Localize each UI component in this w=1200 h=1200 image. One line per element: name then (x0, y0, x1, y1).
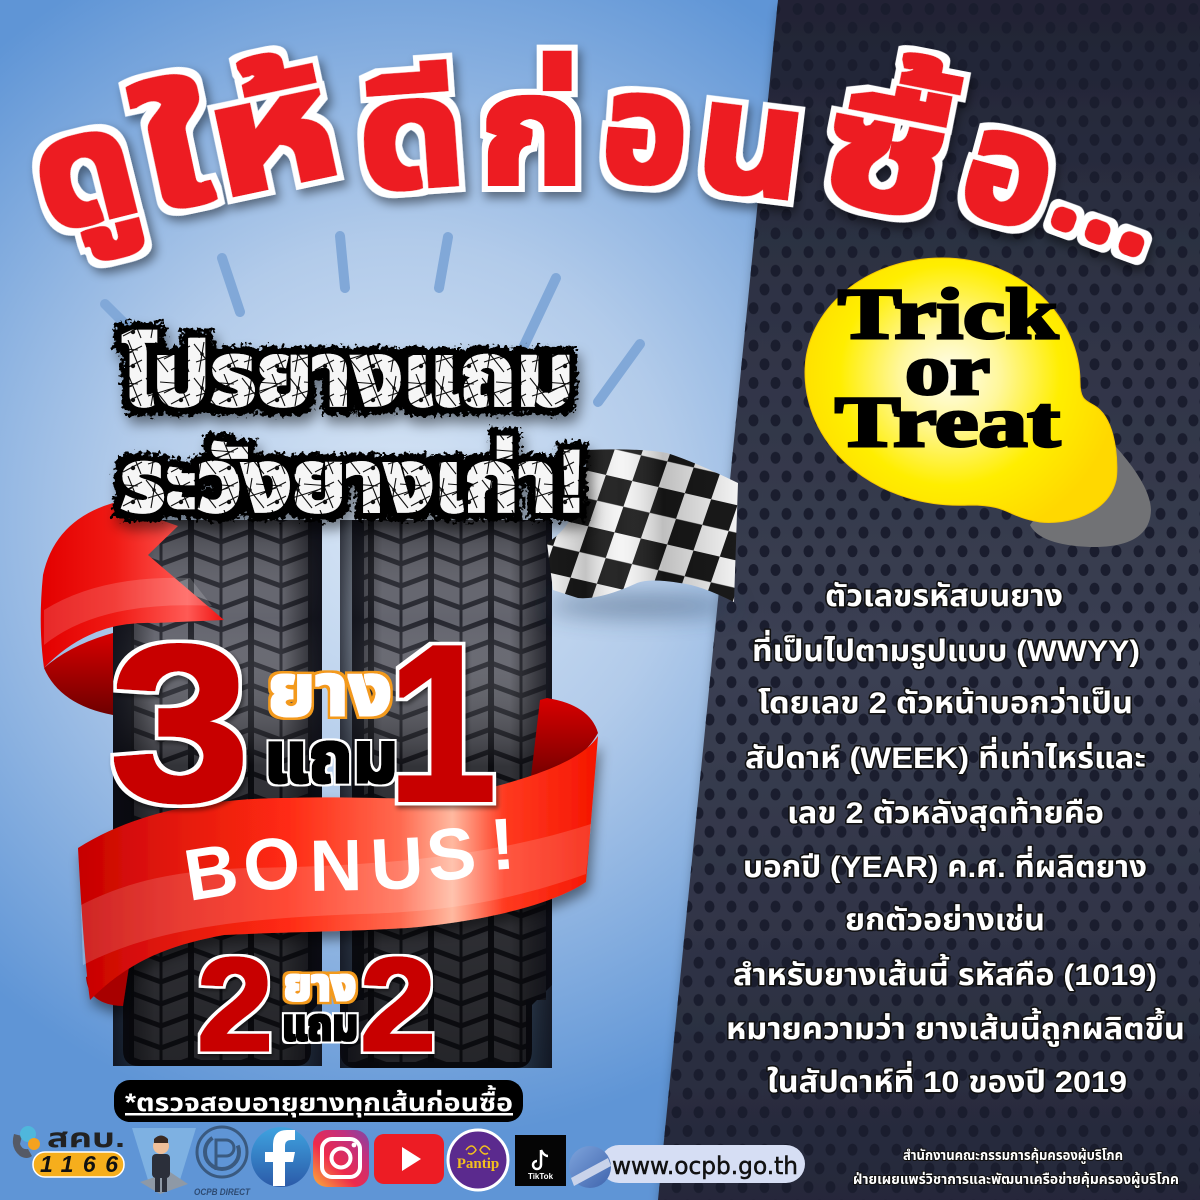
explanation text block: เลข 2 ตัวหลังสุดท้ายคือ (787, 797, 1104, 831)
website address: www.ocpb.go.th (612, 1152, 798, 1180)
logo: OCPB hotline 1166 (13, 1123, 125, 1177)
main title: ซื้ (809, 41, 967, 252)
office credit (853, 1147, 1179, 1189)
office credit: สำนักงานคณะกรรมการคุ้มครองผู้บริโภค (903, 1147, 1123, 1165)
motion strokes above headline (105, 236, 640, 402)
word: BONUS: O (239, 821, 304, 908)
icon: chat bubbles (20, 1126, 40, 1150)
main title: น (689, 50, 815, 232)
main title: ให้ (122, 36, 352, 244)
word: BONUS: ! (487, 803, 517, 886)
main title (15, 36, 1183, 282)
number 1: 1 (388, 600, 496, 848)
icon: YouTube (374, 1134, 444, 1184)
badge: Treat: Treat (835, 382, 1060, 462)
explanation text block (726, 580, 1185, 1099)
main title: อ (946, 76, 1074, 262)
explanation text block: บอกปี (YEAR) ค.ศ. ที่ผลิตยาง (743, 845, 1147, 884)
icon: TikTok (515, 1135, 566, 1186)
explanation text block: ที่เป็นไปตามรูปแบบ (WWYY) (752, 629, 1140, 669)
explanation text block: หมายความว่า ยางเส้นนี้ถูกผลิตขึ้น (726, 1007, 1185, 1047)
word: BONUS: B (179, 829, 244, 917)
red ribbon: back parts (41, 503, 598, 785)
website pill (569, 1145, 805, 1188)
badge: grey shadow (1030, 430, 1151, 547)
main title: ... (1039, 129, 1183, 282)
icon: Pantip (448, 1130, 508, 1190)
offer: 2 tyres get 2 free (197, 931, 436, 1078)
grunge line 1: โปรยางแถม (122, 325, 574, 424)
ribbon: upper-left curl (41, 503, 224, 715)
badge: Trick or Treat (805, 258, 1151, 547)
word: BONUS (179, 803, 517, 917)
icon: globe (569, 1146, 611, 1188)
explanation text block: ในสัปดาห์ที่ 10 ของปี 2019 (767, 1060, 1127, 1099)
explanation text block: ตัวเลขรหัสบนยาง (825, 580, 1063, 613)
explanation text block: สัปดาห์ (WEEK) ที่เท่าไหร่และ (745, 736, 1146, 775)
icon: phone (13, 1134, 32, 1158)
note pill: check tyre age: *ตรวจสอบอายุยางทุกเส้นก่อนซื้อ (125, 1085, 513, 1118)
grunge line 2: ระวังยางเก่า! (120, 434, 586, 530)
note pill: check tyre age (114, 1080, 523, 1122)
word: BONUS: N (309, 825, 363, 907)
background: dark perforated panel (658, 0, 1200, 1200)
tyres (113, 520, 552, 1068)
red ribbon: front band (78, 736, 598, 1006)
main title: ดี (352, 46, 470, 223)
checkered flag (545, 449, 738, 616)
main title: ก่ (480, 46, 584, 216)
icon: TikTok: TikTok (528, 1172, 554, 1181)
ribbon: lower-left fold (86, 960, 130, 1006)
word: BONUS: U (369, 822, 425, 906)
icon: Facebook (251, 1127, 311, 1187)
tyre: left (113, 520, 322, 1066)
number 2 right: 2 (360, 931, 436, 1078)
badge: or: or (905, 330, 990, 410)
ribbon: right back loop (530, 698, 598, 785)
office credit: ฝ่ายเผยแพร่วิชาการและพัฒนาเครือข่ายคุ้มครองผู้บริโภค (853, 1171, 1179, 1189)
grunge headline (120, 325, 586, 530)
icon: Pantip: Pantip (457, 1156, 499, 1172)
number 3: 3 (110, 600, 250, 848)
logo: OCPB Direct: OCPB DIRECT (194, 1187, 251, 1197)
icon: Instagram (313, 1130, 369, 1187)
word: tyre: ยาง (268, 651, 392, 731)
badge: yellow bulb (805, 258, 1117, 523)
explanation text block: สำหรับยางเส้นนี้ รหัสคือ (1019) (733, 953, 1157, 992)
main title: ดู (15, 75, 155, 271)
tyre: right (340, 520, 552, 1068)
word: BONUS: S (422, 812, 480, 898)
word: free: แถม (264, 718, 398, 798)
number 2 left: 2 (197, 931, 273, 1078)
offer: 3 tyres get 1 free (110, 600, 496, 848)
word: tyre small: ยาง (284, 961, 356, 1010)
explanation text block: ยกตัวอย่างเช่น (845, 904, 1045, 937)
wordmark: สคบ. (47, 1123, 125, 1153)
main title: อ (598, 41, 693, 217)
word: free small: แถม (282, 1001, 358, 1050)
logo: OCPB Direct (194, 1127, 251, 1197)
explanation text block: โดยเลข 2 ตัวหน้าบอกว่าเป็น (758, 687, 1133, 720)
badge: Trick: Trick (838, 274, 1058, 354)
icon: OCPB direct mascot (132, 1128, 196, 1194)
hotline number: 1166 (40, 1151, 118, 1177)
